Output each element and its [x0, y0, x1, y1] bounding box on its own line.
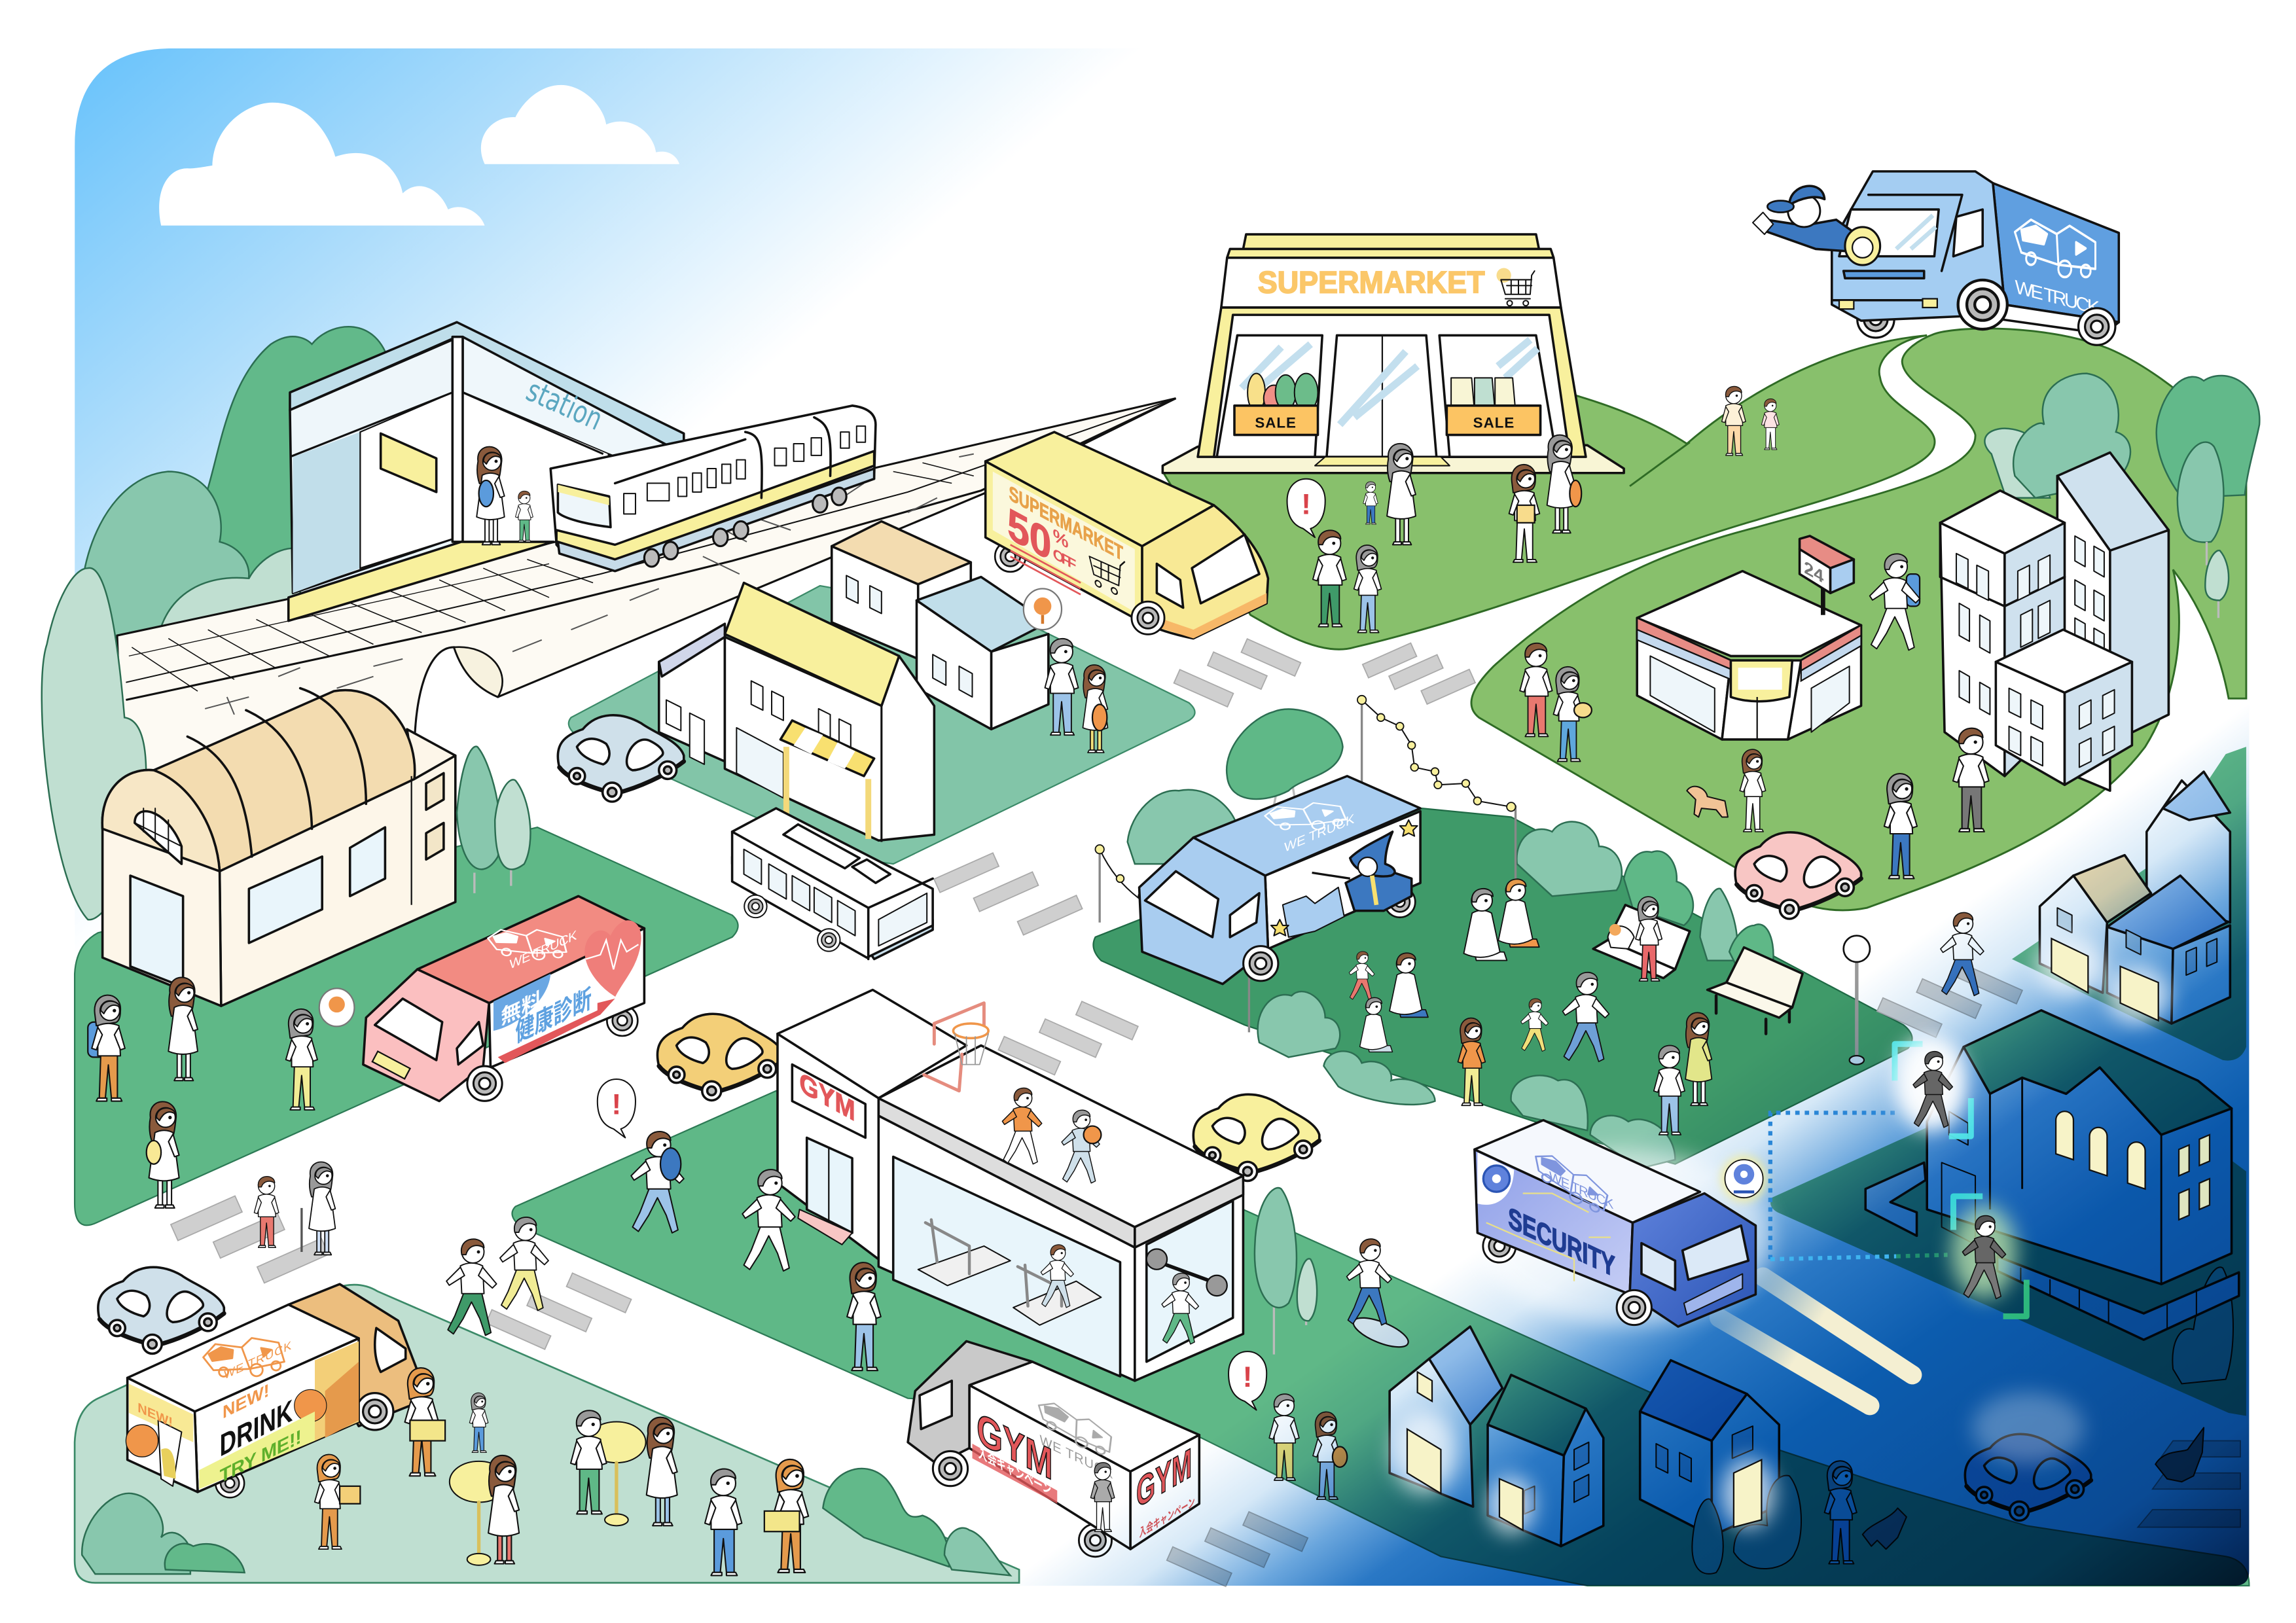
lot: top right houses — [2012, 747, 2246, 1061]
person: drink child — [469, 1393, 488, 1452]
person: man pointing — [1045, 639, 1079, 735]
car pale yellow — [1193, 1094, 1319, 1181]
sky background — [75, 48, 1088, 911]
person: table left woman — [488, 1455, 519, 1563]
street lamp — [1844, 936, 1870, 1065]
person: night woman with phone — [1825, 1461, 1857, 1563]
person: thief on ground — [1962, 1216, 2005, 1299]
hill ridge line — [1630, 442, 1690, 486]
icon: camera bubble — [1721, 1155, 1767, 1202]
house: tan roof — [832, 522, 971, 659]
station sign text: station — [521, 372, 608, 438]
wizard figure — [1312, 832, 1412, 911]
person: gray woman entering gym — [742, 1169, 795, 1271]
car pink — [1735, 832, 1861, 919]
lot: park — [1093, 808, 1912, 1164]
glow: thief on ground — [1952, 1205, 2017, 1299]
person: skateboarder — [1347, 1239, 1412, 1353]
truck: gym: 入会キャンペーン — [978, 1446, 1051, 1498]
person: drink orange cap right — [404, 1368, 445, 1476]
house: yellow roof shop — [659, 583, 934, 842]
train — [550, 406, 876, 571]
truck: blue WE TRUCK — [1753, 171, 2119, 345]
bubble idea left — [319, 988, 354, 1026]
night trees — [1692, 1267, 2233, 1574]
station building — [290, 322, 684, 593]
person: coffee walker — [847, 1262, 881, 1370]
gym sign: GYM — [800, 1066, 855, 1128]
truck: drink stand — [126, 1284, 418, 1497]
park people group — [1349, 879, 1712, 1135]
hill lawn right — [1471, 329, 2246, 910]
truck: drink stand: DRINK — [220, 1393, 293, 1464]
cloud small — [481, 85, 679, 164]
glow: house windows — [1393, 937, 2170, 1535]
string lights and poles — [1095, 696, 1516, 1032]
tree: dark green behind station — [205, 327, 390, 586]
trees at arched building — [457, 747, 530, 893]
truck: pink health check: 健康診断 — [516, 983, 592, 1048]
person: blue bag walker — [631, 1132, 684, 1233]
truck: drink stand: WE TRUCK — [224, 1338, 292, 1382]
person: station child — [516, 491, 533, 542]
bus — [732, 808, 933, 959]
truck: blue wizard library — [1139, 776, 1420, 984]
headlight beams — [1719, 1277, 1912, 1406]
camera signal brackets — [1895, 1044, 2026, 1316]
bubble alert: ! — [611, 1088, 621, 1121]
office tower — [1940, 452, 2168, 791]
night cat — [2155, 1427, 2204, 1482]
truck: blue wizard library: WE TRUCK — [1284, 812, 1354, 855]
person: left lot woman — [168, 977, 198, 1080]
shop awning — [780, 721, 874, 776]
cloud large — [159, 103, 485, 226]
trees behind tower — [1984, 374, 2259, 618]
tree cypress left — [42, 568, 146, 919]
truck: drink stand: TRY ME!! — [220, 1425, 302, 1488]
table right — [587, 1421, 646, 1525]
truck: drink stand: NEW! — [137, 1400, 173, 1431]
person: shorts man — [1269, 1394, 1299, 1480]
person: hill kid pink — [1761, 399, 1779, 450]
person: store red pants — [1520, 643, 1552, 736]
lot: night main house — [1770, 1025, 2246, 1416]
person: child at crosswalk — [254, 1177, 279, 1247]
speech bubble alert: ! — [1301, 488, 1311, 520]
lot: arched building — [75, 827, 738, 1225]
supermarket — [1162, 234, 1624, 473]
person: seated orange — [1498, 879, 1539, 947]
drink truck texts: NEW! — [223, 1380, 270, 1423]
person: store bun blue pants — [1553, 667, 1592, 761]
bubble alert right: ! — [1243, 1361, 1253, 1393]
table left — [450, 1461, 508, 1565]
person: market woman blue jeans — [1354, 545, 1382, 633]
sale box right: SALE — [1473, 414, 1514, 431]
convenience store — [1637, 571, 1861, 740]
person: park man waving — [1654, 1046, 1685, 1135]
person: hill kid orange — [1722, 386, 1746, 455]
dog — [1687, 787, 1728, 817]
truck: gym: GYM — [1136, 1440, 1192, 1517]
house: blue roof — [917, 577, 1049, 729]
person: table woman — [647, 1418, 677, 1525]
person: park kid running — [1521, 999, 1549, 1051]
glow: security truck — [1479, 1149, 1772, 1325]
lit windows — [1407, 938, 2210, 1530]
truck: supermarket yellow: OFF — [1053, 545, 1076, 574]
night dog — [1863, 1508, 1907, 1549]
park trees — [1128, 709, 1343, 864]
truck yellow ad text: SUPERMARKET — [1009, 482, 1123, 566]
produce display — [1247, 374, 1318, 412]
sign 24 hours: 24 — [1804, 558, 1823, 588]
person: left lot yellow pants — [286, 1009, 317, 1110]
night house 3 — [1640, 1361, 1779, 1536]
night overlay — [1029, 721, 2249, 1586]
truck: security — [1475, 1120, 1755, 1327]
truck: pink health check: WE TRUCK — [510, 928, 577, 972]
truck: pink health check — [363, 896, 644, 1101]
person: walking woman — [147, 1101, 179, 1208]
tree: mint behind station — [81, 472, 249, 645]
person: market child — [1363, 482, 1378, 524]
office low block — [1996, 630, 2132, 785]
person: weightlifter — [1147, 1249, 1227, 1344]
person: doctor woman — [1884, 774, 1917, 878]
crosswalks — [171, 639, 2240, 1586]
person: woman orange bag — [1083, 665, 1107, 753]
person: drink blue pants — [705, 1469, 742, 1575]
icon: shopping cart — [1496, 268, 1535, 306]
truck: pink health check: 無料 — [501, 987, 542, 1029]
person: park father — [1562, 972, 1609, 1061]
truck: gym — [908, 1341, 1199, 1557]
person: night runner — [1941, 912, 1984, 995]
lot: houses row — [569, 586, 1195, 864]
person: selfie — [1458, 1018, 1485, 1105]
car night — [1965, 1434, 2091, 1520]
night house 1 — [1390, 1327, 1502, 1507]
person: drink server — [764, 1459, 808, 1573]
night houses upper — [2039, 772, 2230, 1024]
person: market gray woman — [1387, 444, 1416, 544]
person: dog walker — [1740, 749, 1766, 832]
bench empty — [1708, 948, 1803, 1034]
person: park woman yellow skirt — [1685, 1012, 1712, 1105]
person: suit man with backpack — [1870, 554, 1920, 650]
night main house — [1865, 1010, 2239, 1340]
sale box left: SALE — [1255, 414, 1296, 431]
person: left lot backpack — [88, 995, 125, 1101]
truck: security: WE TRUCK — [1549, 1169, 1613, 1212]
lot: gym strip — [512, 1091, 2249, 1586]
glow: climbing thief — [1895, 1037, 1965, 1130]
person: runner yellow — [500, 1217, 548, 1310]
person: market shopper brown — [1509, 465, 1539, 562]
car blue west — [98, 1267, 224, 1353]
person: roof basketball player — [1062, 1110, 1101, 1183]
bush drink left — [82, 1493, 245, 1574]
person: climbing thief — [1913, 1052, 1952, 1128]
bubble alert right — [1229, 1351, 1266, 1410]
treadmill one — [918, 1220, 1011, 1285]
driver waving — [1753, 186, 1880, 265]
person: table man — [571, 1410, 607, 1514]
person: roof dancer orange — [1002, 1088, 1042, 1164]
gym door — [807, 1137, 852, 1233]
circuit pattern — [1486, 1193, 1611, 1281]
truck: supermarket yellow: 50 — [1007, 498, 1051, 571]
arched building — [102, 688, 456, 1006]
lot: drink stand — [75, 1285, 1019, 1583]
person: park child — [1349, 952, 1374, 1000]
truck: supermarket yellow — [986, 432, 1268, 639]
viaduct — [117, 399, 1176, 834]
person: ponytail woman — [1313, 1412, 1347, 1499]
person: man with folder — [1953, 728, 1989, 832]
person: granny with cane — [302, 1162, 335, 1255]
person: runner green — [446, 1239, 497, 1335]
wizard open book — [1283, 887, 1344, 937]
basketball hoop — [924, 1003, 988, 1091]
speech bubble alert — [1287, 479, 1325, 537]
truck: gym: 入会キャンペーン — [1139, 1495, 1195, 1541]
truck: gym: WE TRUCK — [1039, 1432, 1113, 1482]
car blue — [558, 715, 684, 802]
tree: pale behind station — [158, 548, 300, 652]
security text: SECURITY — [1508, 1200, 1615, 1283]
roadside trees — [1255, 1188, 1317, 1355]
treadmill two with runner — [1013, 1245, 1101, 1325]
person: seated back — [1360, 997, 1393, 1052]
person: drink orange cap left — [315, 1455, 360, 1549]
sale box left — [1234, 406, 1318, 435]
sale box right — [1446, 406, 1541, 435]
night house 2 — [1488, 1375, 1604, 1546]
bush drink right — [823, 1469, 1011, 1575]
truck: supermarket yellow: % — [1053, 525, 1068, 553]
bubble idea — [1024, 588, 1062, 630]
bench occupied — [1593, 897, 1690, 981]
sign 24 hours — [1800, 536, 1854, 615]
icon: heart — [585, 921, 641, 995]
park bushes — [1258, 822, 1774, 1168]
supermarket sign text: SUPERMARKET — [1258, 265, 1485, 300]
gym ad text: GYM — [977, 1403, 1053, 1490]
gym — [778, 990, 1243, 1381]
person: station mother — [476, 447, 505, 544]
bubble alert — [598, 1079, 636, 1137]
market hill lawn — [1162, 335, 1935, 649]
person: market shopper gray — [1547, 435, 1581, 533]
truck: blue WE TRUCK: WE TRUCK — [2015, 276, 2100, 319]
person: seated woman blue — [1390, 953, 1428, 1017]
person: market man green pants — [1313, 530, 1346, 627]
car yellow — [657, 1014, 783, 1100]
dotted surveillance lines — [1770, 1113, 1948, 1259]
person: seated gray — [1463, 889, 1507, 961]
platform — [289, 542, 554, 621]
